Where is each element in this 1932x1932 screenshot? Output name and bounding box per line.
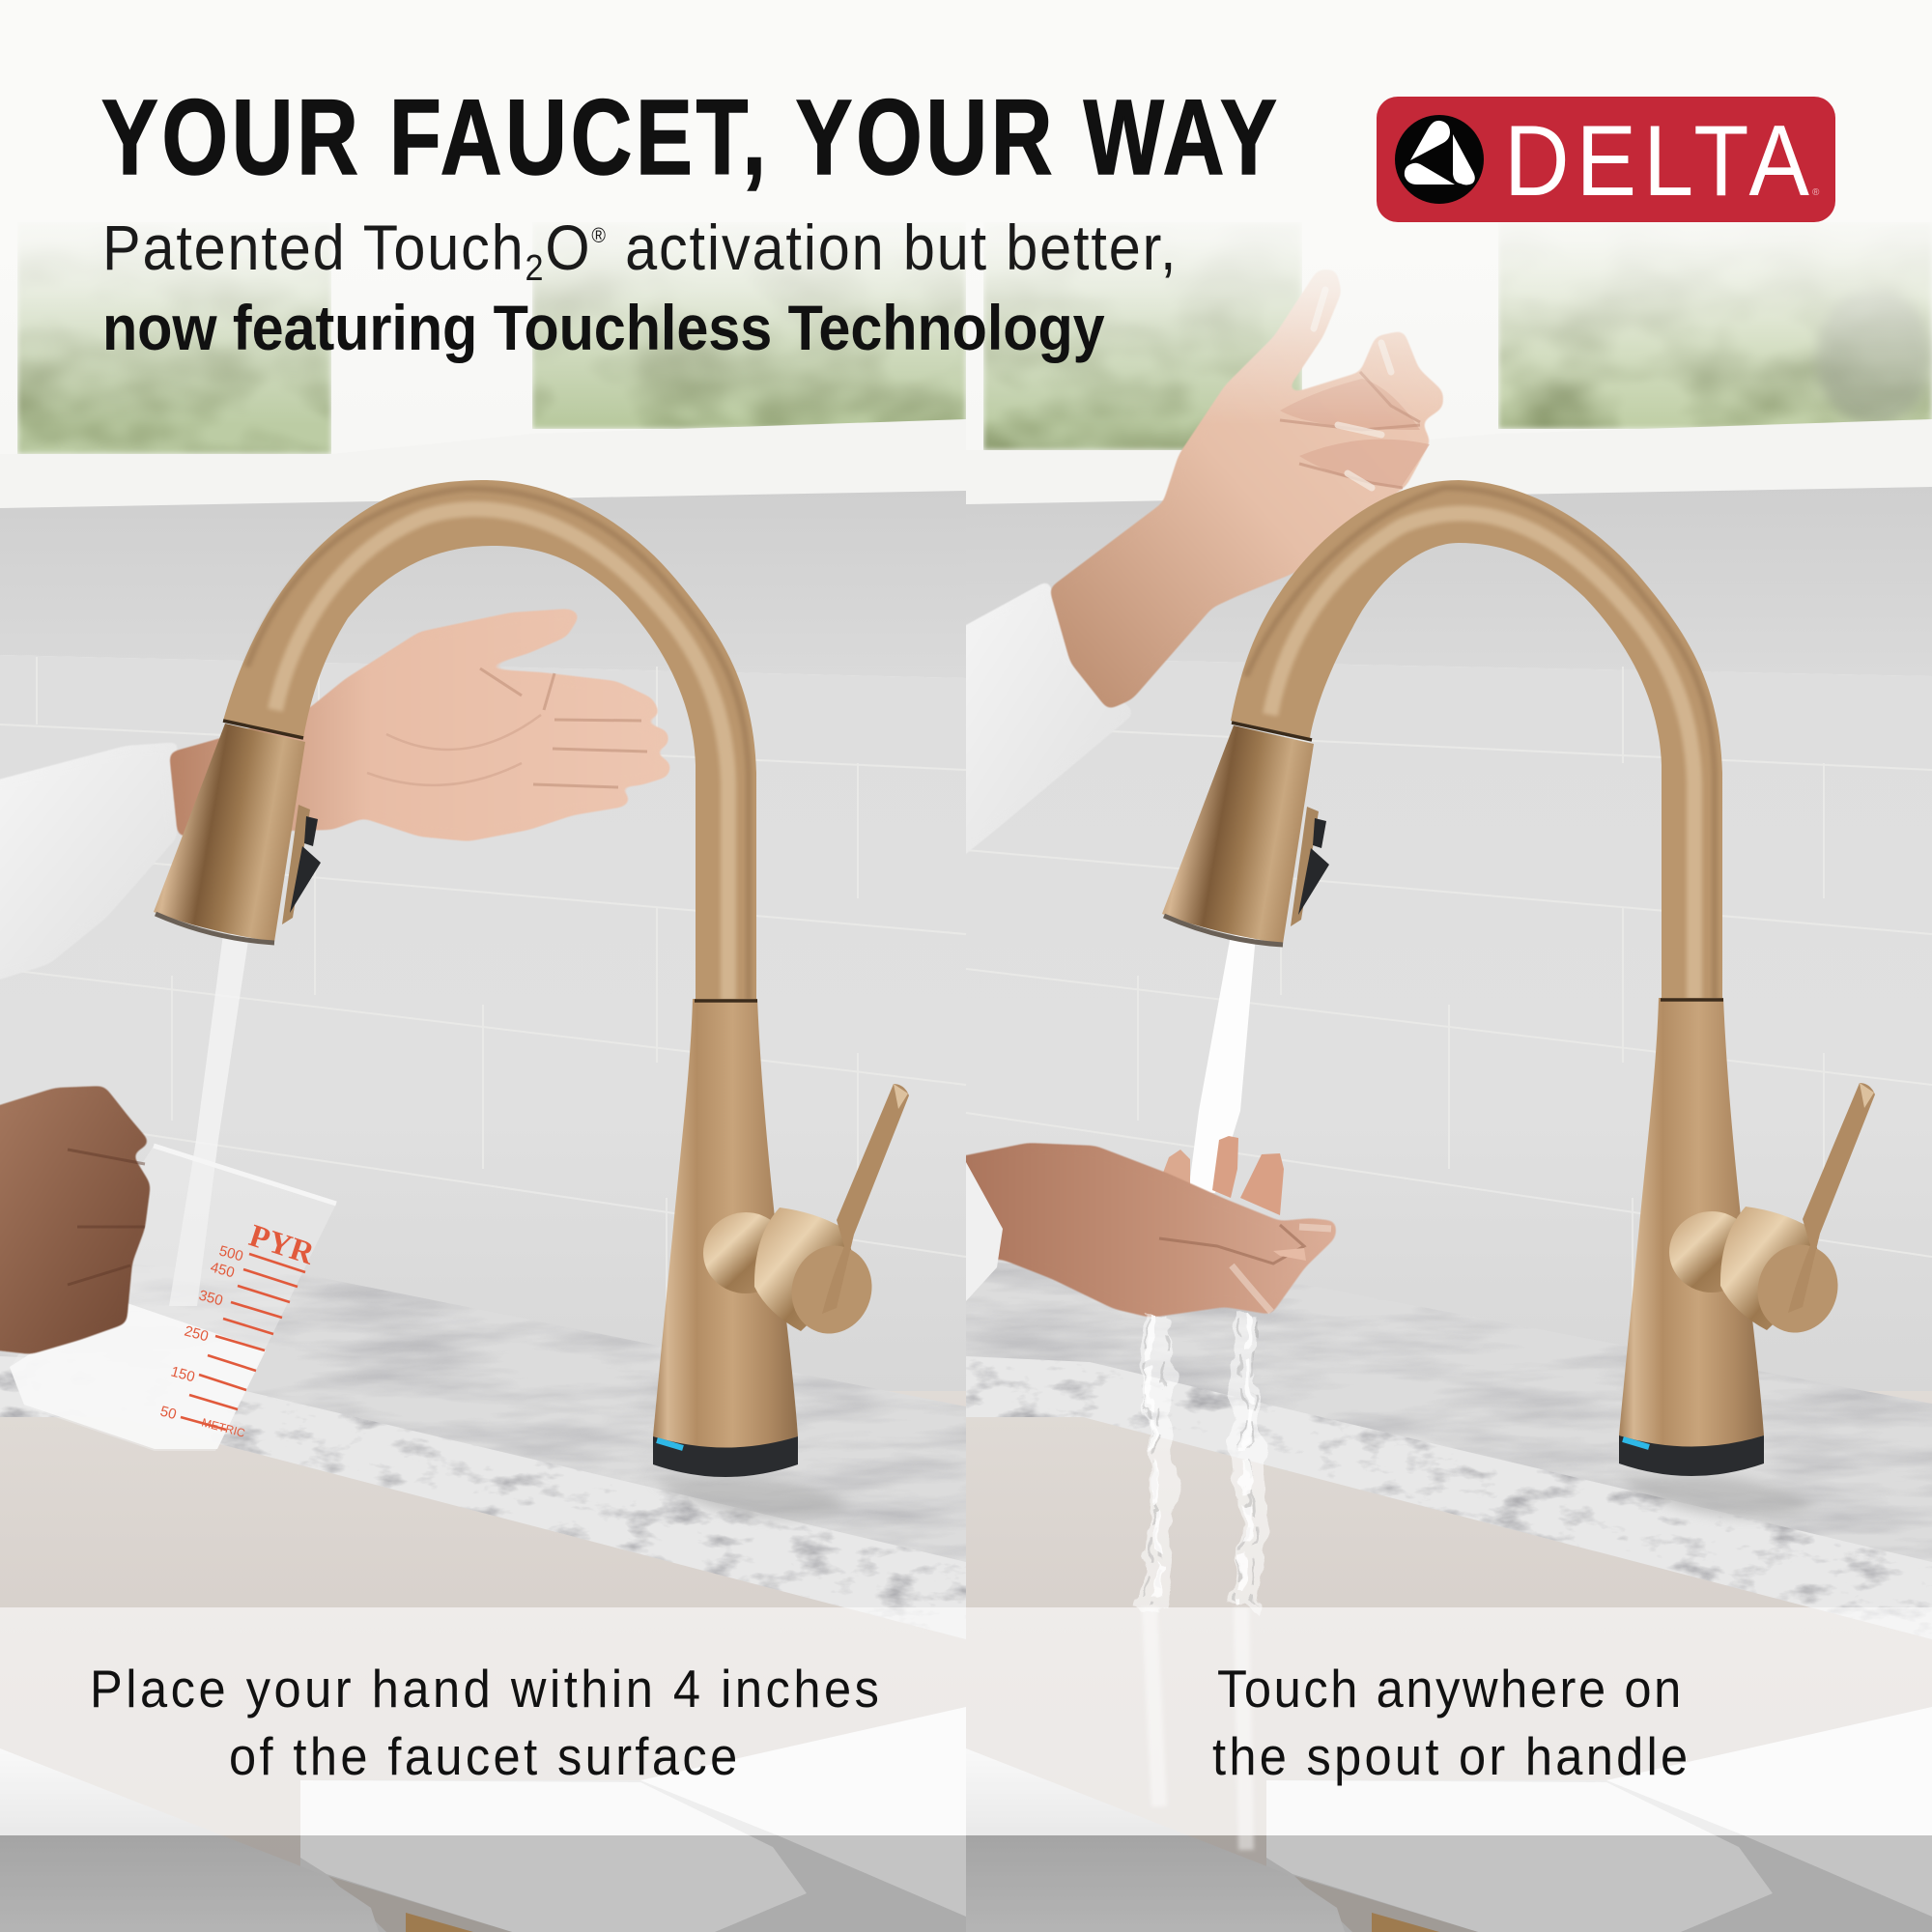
jug brand and numbers: 250 bbox=[183, 1322, 211, 1345]
jug brand and numbers bbox=[158, 1218, 319, 1440]
right water stream from head bbox=[1188, 935, 1256, 1193]
left faucet spout arch bbox=[223, 480, 756, 1001]
jug brand and numbers: METRIC bbox=[200, 1415, 247, 1440]
subtitle line one: Patented Touch bbox=[102, 213, 524, 284]
window wall bbox=[0, 0, 1932, 676]
right panel tile wall bbox=[966, 657, 1932, 1420]
left bottom caption band bbox=[0, 1607, 966, 1835]
left faucet base and handle bbox=[653, 999, 909, 1519]
right panel white sill bbox=[966, 419, 1932, 508]
left caption text bbox=[90, 1660, 879, 1786]
distant grey tree right bbox=[1816, 290, 1932, 425]
right counter front edge bbox=[966, 1356, 1932, 1639]
logo wordmark: DELTA bbox=[1504, 103, 1809, 216]
left panel window pane 2 bbox=[532, 222, 966, 429]
subtitle line one: activation but better, bbox=[608, 213, 1177, 284]
sink front right bbox=[966, 1391, 1932, 1932]
left panel backsplash band bbox=[0, 491, 966, 678]
logo black circle with triangle drops bbox=[1395, 115, 1484, 204]
subtitle line one: 2 bbox=[526, 246, 544, 288]
right panel scene bbox=[947, 270, 1722, 1850]
subtitle line one: ® bbox=[591, 224, 607, 247]
right faucet spout arch bbox=[1231, 480, 1722, 1001]
right panel backsplash band bbox=[966, 487, 1932, 676]
right caption line two: the spout or handle bbox=[1212, 1727, 1688, 1786]
right lower cupped hand bbox=[947, 1136, 1336, 1318]
jug brand and numbers: 500 bbox=[217, 1242, 245, 1264]
logo registered mark: ® bbox=[1812, 187, 1820, 198]
left counter front edge bbox=[0, 1356, 966, 1639]
jug brand and numbers: 350 bbox=[197, 1287, 225, 1309]
jug measurement lines bbox=[181, 1254, 305, 1430]
Delta logo bbox=[1377, 97, 1835, 222]
left hand holding jug bbox=[0, 1086, 151, 1354]
title: YOUR FAUCET, YOUR WAY bbox=[101, 79, 1277, 197]
right touching hand bbox=[1049, 270, 1443, 710]
right lower sleeve bbox=[966, 1162, 1003, 1301]
right panel window pane 2 bbox=[1498, 222, 1932, 429]
jug brand and numbers: 50 bbox=[158, 1403, 178, 1423]
right caption text bbox=[1212, 1660, 1688, 1786]
left counter top marble bbox=[0, 1256, 966, 1565]
water falling from hand bbox=[1146, 1312, 1261, 1608]
faint water through banner bbox=[1150, 1607, 1246, 1850]
top white fade bbox=[0, 0, 1932, 425]
left panel window pane 1 bbox=[17, 222, 331, 454]
sink front left bbox=[0, 1391, 966, 1932]
left caption line two: of the faucet surface bbox=[229, 1727, 737, 1786]
right upper sleeve bbox=[966, 583, 1124, 853]
right bottom caption band bbox=[966, 1607, 1932, 1835]
right faucet base and handle bbox=[1619, 998, 1875, 1518]
left panel tile wall bbox=[0, 655, 966, 1420]
right caption line one: Touch anywhere on bbox=[1217, 1660, 1681, 1719]
bottom shaded strip bbox=[0, 1835, 1932, 1932]
subtitle line one: O bbox=[545, 213, 590, 284]
left caption line one: Place your hand within 4 inches bbox=[90, 1660, 879, 1719]
logo red badge bbox=[1377, 97, 1835, 222]
left panel white sill bbox=[0, 419, 966, 510]
right panel window pane 1 bbox=[983, 222, 1302, 450]
left panel scene bbox=[0, 480, 756, 1451]
jug brand and numbers: PYR bbox=[245, 1218, 319, 1272]
jug brand and numbers: 450 bbox=[209, 1259, 237, 1281]
jug brand and numbers: 150 bbox=[169, 1363, 197, 1385]
right pull-down head bbox=[1162, 723, 1329, 945]
lower marble ledges right bbox=[966, 1707, 1932, 1932]
left pull-down head bbox=[154, 721, 321, 943]
tile grout lines bbox=[0, 657, 1932, 1333]
lower marble ledges left bbox=[0, 1707, 966, 1932]
left open hand bbox=[169, 609, 671, 841]
right counter top marble bbox=[966, 1261, 1932, 1565]
left sleeve bbox=[0, 742, 182, 985]
subtitle line two: now featuring Touchless Technology bbox=[102, 293, 1105, 364]
left water stream bbox=[169, 934, 249, 1306]
left measuring jug bbox=[10, 1146, 336, 1451]
